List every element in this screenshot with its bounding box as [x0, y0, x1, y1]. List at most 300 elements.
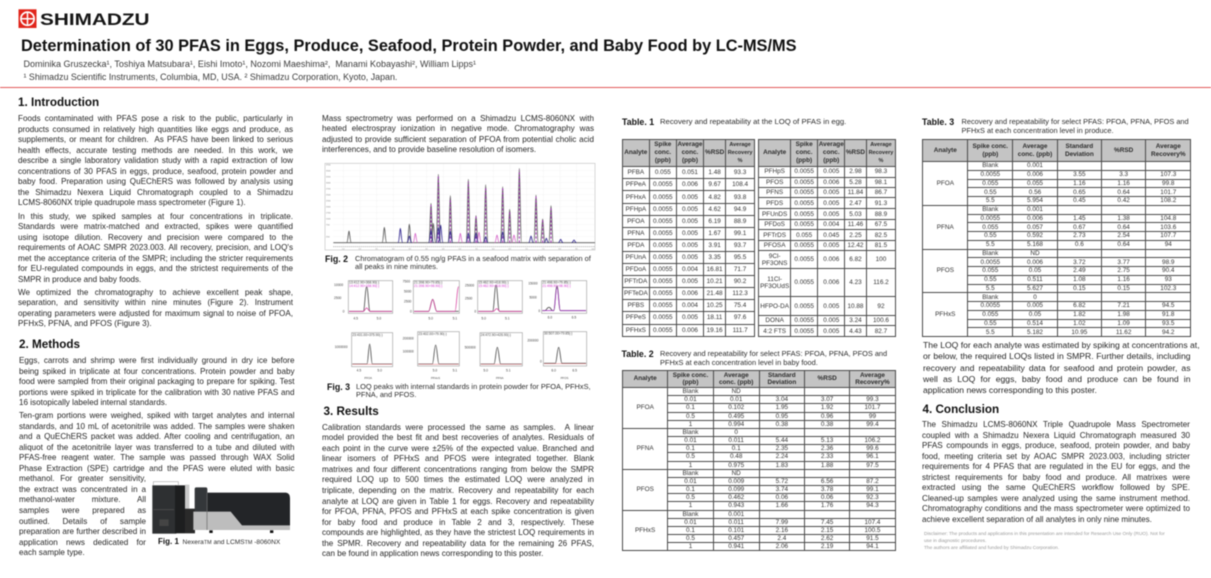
table 3 data: 0.592 [1027, 232, 1043, 239]
table 2 data: 87.2 [866, 478, 879, 485]
table 3 data: Average [1156, 143, 1181, 150]
table 3 data: 3.72 [1073, 259, 1086, 266]
table 3 data: 5.182 [1027, 329, 1043, 336]
table 3 data: 1.02 [1073, 320, 1086, 327]
table 1 left part: 10.21 [707, 278, 723, 285]
text: LOQ estimation paragraph: recovery and repeatability data for seafood and protein powder, as [923, 362, 1190, 372]
caption: figure 3: LOQ peaks with internal standards in protein powder for PFOA, PFHxS, [356, 382, 591, 390]
text: LOQ estimation paragraph: application news corresponding to this poster. [923, 385, 1097, 395]
panel: methods [18, 338, 295, 558]
text: results paragraph: matrixes and four different concentrations ranging from below the SMPR [322, 465, 594, 474]
table 3 data: 0.55 [984, 232, 997, 239]
table 1 left part: %RSD [705, 149, 724, 156]
table 2 data: 0.099 [728, 486, 744, 493]
table 2 data: Blank [682, 429, 698, 436]
table 3 data: PFHxS [935, 311, 955, 318]
text: conclusion paragraph: requirements for 4 PFAS that are regulated in the EU for eggs, and the [922, 462, 1190, 471]
table 3 data: ND [1030, 250, 1040, 257]
text: methods paragraph 2 narrow wrap: methanol-water mixture. All [19, 495, 146, 504]
table 1 left part: PFTeDA [624, 290, 648, 297]
table 3 data: 0.055 [982, 180, 998, 187]
text: introduction paragraph 1: supplements, or meant for children. As PFAS have been linked to serious [18, 135, 293, 144]
table 3 data: %RSD [1114, 147, 1133, 154]
table 1 left part: 108.4 [732, 181, 748, 188]
text: introduction paragraph 3: PFHxS, PFNA, and PFOS (Figure 3). [18, 319, 152, 328]
table 3 data: 0.67 [1073, 224, 1086, 231]
figure 2: chromatogram: 22500 [326, 201, 331, 203]
figure 3: LOQ peak panels: 23:431.00>375.90(-) [352, 333, 383, 337]
table 2 data: 0.5 [686, 453, 695, 460]
text: results paragraph: required LOQ up to 500 times the estimated LOQ were analyzed in [322, 475, 594, 484]
figure 3: LOQ peak panels: 5.0 [481, 316, 486, 320]
table 3 data: 0.05 [1029, 267, 1041, 274]
table 3 title [921, 117, 1189, 135]
text: disclaimer: Disclaimer: The products and applications in this presentation are intended for Research Use Only (RUO). Not for [924, 532, 1165, 536]
text: methods paragraph 2: Ten-gram portions were weighed, spiked with target analytes and internal [19, 411, 294, 420]
title: Determination of 30 PFAS in Eggs, Produce, Seafood, Protein Powder, and Baby Food by LC-MS/MS [21, 37, 797, 55]
table 2 data: 2.33 [821, 453, 833, 460]
table 2 data: 1 [689, 421, 692, 428]
table 2 data: 0.95 [776, 413, 788, 420]
table 3 data: 5.627 [1027, 285, 1043, 292]
table 2 data: Blank [682, 388, 698, 395]
figure 3: LOQ peak panels: PFHxS [431, 376, 440, 380]
table 3 data: Spike conc. [973, 143, 1008, 150]
table 3 data: 101.7 [1160, 189, 1176, 196]
figure 3: LOQ peak panels: 15:462.90>418.90(-) [478, 284, 509, 288]
table 1 right part: 6.82 [849, 256, 862, 263]
table 1 left part: (ppb) [682, 157, 698, 164]
text: chromatography paragraph [322, 114, 594, 154]
text: methods paragraph 2 narrow wrap: the extract was concentrated in a [19, 485, 146, 494]
table 2 data: 1.88 [821, 462, 833, 469]
table 1 right part: 0.045 [823, 232, 839, 239]
table 1 left part: PFNA [627, 230, 644, 237]
table 3 data: 107.7 [1160, 232, 1176, 239]
table 2 data: 99 [869, 413, 876, 420]
table 2 data: 2.24 [776, 453, 788, 460]
table 2 data: 3.07 [821, 396, 833, 403]
table 2 data: 0.96 [821, 413, 833, 420]
table 1 right part: 4.23 [849, 279, 862, 286]
table 1 left part: 0.0055 [653, 242, 673, 249]
text: introduction paragraph 2: requirements of AOAC SMPR 2023.003. All recovery, precision, and LOQ's [18, 243, 293, 252]
table 1 left part: 0.005 [682, 314, 698, 321]
table 3 data: 1.09 [1117, 320, 1130, 327]
figure 3: LOQ peak panels: 5.1 [505, 316, 510, 320]
table 1 right part: PFTrDS [763, 232, 786, 239]
table 2 data: 0 [734, 429, 738, 436]
figure 3: LOQ peak panels: 5.0 [377, 316, 381, 320]
figure 3: LOQ peak panels: 14:412.90>168.90(-) [349, 284, 379, 288]
figure 1: instrument photo [152, 480, 291, 534]
figure 3: LOQ peak panels: 1000000 [335, 345, 348, 349]
table 1 left part: Recovery [728, 150, 752, 156]
figure 3: LOQ peak panels: 24:472.90>426.90(-) [481, 333, 511, 337]
table 3 data: 0.514 [1027, 320, 1043, 327]
caption: figure 2: all peaks in nine minutes. [355, 262, 438, 271]
figure 3: LOQ peak panels: 21:498.90>79.85(-) [542, 281, 571, 285]
table 2 data: 96.1 [866, 453, 879, 460]
figure 2: chromatogram: 7500 [326, 225, 330, 227]
table 2 data: 1 [689, 462, 692, 469]
table 1 left part: Average [729, 142, 751, 148]
table 1 right part: 0.0055 [794, 328, 814, 335]
table 3 data: 0 [1033, 294, 1037, 301]
table 2 data: 1.83 [776, 462, 788, 469]
table 1 left part: 0.005 [682, 254, 698, 261]
text: chromatography paragraph: interferences, and to provide baseline resolution of isomers. [322, 145, 536, 154]
figure 3: LOQ peak panels: 5000 [529, 295, 537, 299]
text: introduction paragraph 2: In this study, we spiked samples at four concentrations in triplicate. [18, 212, 293, 221]
table 3 data: 0.55 [984, 320, 997, 327]
table 3 data: 11.62 [1116, 329, 1131, 336]
table 1 right part: DONA [765, 317, 784, 324]
table 1 right part: 0.0055 [794, 303, 814, 310]
table 1 right part: 11.46 [848, 221, 863, 228]
table 3 data: Analyte [934, 147, 957, 154]
text: methods paragraph 2: PFAS-free reagent water. The sample was passed through WAX Solid [19, 453, 294, 462]
table 2 data: 6.56 [821, 478, 833, 485]
figure 2: chromatogram: 4.0 [425, 248, 428, 250]
table 2 data: 0.38 [776, 421, 788, 428]
table 3 data: 0.001 [1027, 206, 1043, 213]
table 2 data: 1.92 [821, 404, 833, 411]
table 1 left part: 112.3 [732, 290, 748, 297]
text: results paragraph: for PFOA, PFNA, PFOS and PFHxS at each spike concentration is given [322, 507, 594, 516]
figure 2: chromatogram: 8.5 [575, 248, 578, 250]
table 3 data: PFOS [937, 267, 954, 274]
figure 2: chromatogram: 5.5 [475, 248, 478, 250]
table 1 right part: 0.005 [823, 168, 839, 175]
table 3 data: (ppb) [982, 150, 998, 158]
table 1 right part: 0.006 [823, 179, 839, 186]
figure 2: chromatogram: 25000 [326, 195, 331, 197]
text: conclusion paragraph: PFAS compounds in eggs, produce, seafood, protein powder, and baby [922, 441, 1190, 450]
table 1 right part: (ppb) [823, 157, 839, 164]
table 1 right part: 0.005 [823, 211, 839, 218]
table 1 right part: 0.005 [823, 303, 839, 310]
table 1 left part: 90.2 [734, 278, 746, 285]
table 3 data: 2.75 [1117, 267, 1130, 274]
table 2 data: 0.1 [686, 527, 695, 534]
table 3 data: 90.4 [1162, 267, 1174, 274]
table 1 left part: 0.006 [682, 290, 698, 297]
table 3 data: 5.5 [986, 329, 995, 336]
table 2 data: 97.5 [866, 462, 879, 469]
figure 2: chromatogram: 2.5 [375, 248, 378, 250]
figure 2: chromatogram [324, 162, 596, 251]
table 1 left part: 0.0055 [653, 278, 673, 285]
figure 3: LOQ peak panels: 15000 [528, 282, 538, 286]
table 1 right part: 9Cl- [769, 253, 780, 260]
text: methods paragraph 1: 16 isotopically labeled internal standards. [19, 398, 167, 407]
table 3 data: 5.954 [1027, 197, 1043, 204]
table 2 data: 0.975 [728, 462, 744, 469]
text: conclusion paragraph: achieve excellent separation of all analytes in only nine minutes. [922, 515, 1152, 524]
logo: Shimadzu [18, 8, 150, 29]
figure 3: LOQ peak panels: 21:498.90>98.90(-) [542, 284, 571, 288]
table 3 data: 94.2 [1162, 329, 1174, 336]
table 1 left part: 0.0055 [653, 314, 673, 321]
table 3 data: 0.64 [1117, 241, 1130, 248]
table 2 data: 5.13 [821, 437, 833, 444]
table 2 data: PFHxS [635, 527, 655, 534]
text: conclusion paragraph: coupled with a Shimadzu Nexera Liquid Chromatograph measured 30 [922, 431, 1190, 440]
table 1 left part: PFDA [627, 242, 644, 249]
table 1 right part: 100.6 [873, 317, 889, 324]
header: logo, title and authors [0, 8, 1211, 89]
table 1 right part: 0.0055 [794, 189, 814, 196]
table 3 data: 0.55 [984, 189, 997, 196]
text: introduction paragraph 2: using isotope dilution. Recovery and precision were compared to the [18, 233, 293, 242]
figure 2: chromatogram: 32500 [326, 177, 331, 179]
text: results paragraph: analyte at LOQ are given in Table 1 for eggs. Recovery and repeatability [322, 497, 594, 506]
table 2 data: 0.994 [728, 421, 744, 428]
figure 2: chromatogram: 30000 [326, 183, 331, 185]
table 1 right part: 0.0055 [794, 168, 814, 175]
table 1 right part: 88.9 [875, 211, 887, 218]
text: methods paragraph 2 [18, 411, 295, 474]
table 1 left part: % [738, 158, 743, 164]
figure 3: LOQ peak panels: 7500 [403, 280, 410, 284]
table 1 left part: 1.67 [708, 230, 721, 237]
table 1 left part: conc. [654, 149, 671, 156]
table 1 right part: 2.25 [849, 232, 862, 239]
table 1 left part: 0.0055 [653, 218, 673, 225]
figure 2: chromatogram: 37500 [326, 165, 331, 167]
figure 3: LOQ peak panels: 200000 [527, 339, 539, 343]
text: results paragraph [322, 423, 594, 558]
table 3 data: 5.5 [986, 285, 995, 292]
table 1 right part: Average [870, 142, 892, 148]
table 1 title: Recovery and repeatability at the LOQ of PFAS in egg. [660, 117, 846, 126]
text: introduction paragraph 2 [18, 212, 294, 284]
table 3 data: 103.6 [1160, 224, 1176, 231]
text: conclusion paragraph: food, meeting criteria set by AOAC SMPR 2023.003, including stricter [922, 452, 1190, 461]
table 1 right part [757, 138, 897, 338]
table 2 data: 100.5 [864, 527, 880, 534]
figure 3: LOQ peak panels: 2500 [465, 296, 473, 300]
text: conclusion paragraph: Chromatography conditions and the mass spectrometer were optimized to [922, 504, 1190, 513]
table 3 data: 0.511 [1027, 276, 1043, 283]
table 2 data: 0.01 [684, 519, 697, 526]
text: methods paragraph 1: being spiked in triplicate at four concentrations. Protein powder and baby [19, 367, 294, 376]
table 3 data: Average [1022, 143, 1047, 150]
figure 3: LOQ peak panels: 4.5 [357, 368, 361, 372]
figure 3: LOQ peak panels: PFNA [496, 376, 504, 380]
figure 3: LOQ peak panels: 5.1 [453, 368, 457, 372]
table 2 data: 107.4 [864, 519, 880, 526]
table 1 right part: 0.006 [823, 279, 839, 286]
text: conclusion paragraph: strictest requirements for baby food and produce. All matrixes were [922, 473, 1190, 482]
table 1 left part: PFHxS [626, 327, 646, 334]
table 2 data: 0.1 [686, 486, 695, 493]
table 1 right part: 91.3 [875, 200, 887, 207]
table 1 right part: 3.24 [849, 317, 862, 324]
table 1 left part: 71.7 [734, 266, 746, 273]
table 2 data: Analyte [634, 375, 657, 382]
table 2 data: 3.78 [821, 486, 833, 493]
table 3 data: Blank [982, 294, 998, 301]
table 1 left part: Spike [654, 141, 671, 148]
caption: figure 2: Chromatogram of 0.55 ng/g PFAS in a seafood matrix with separation of [355, 254, 591, 262]
table 3 data: 0.0055 [981, 215, 1000, 222]
text: introduction paragraph 1: products consumed in relatively high quantities like eggs and produce, as [18, 125, 293, 134]
table 2 data: Average [860, 372, 885, 379]
table 1 left part: conc. [682, 149, 698, 156]
table 1 right part: 0.055 [796, 232, 812, 239]
table 2 data: PFOS [636, 486, 654, 493]
table 3 data: 0.0055 [981, 259, 1000, 266]
table 1 left part: 0.0055 [653, 194, 673, 201]
text: methods paragraph 2 narrow wrap [18, 474, 146, 558]
table 1 left part [621, 138, 756, 338]
table 3 data: 2.54 [1117, 232, 1130, 239]
table 1 right part: 0.005 [823, 328, 839, 335]
figure 3: LOQ peak panels: PFOS [561, 376, 568, 380]
text: LOQ estimation paragraph [922, 340, 1200, 396]
table 1 left part: 0.006 [682, 181, 698, 188]
table 2 data: 1.66 [776, 502, 788, 509]
table 3 data: 0.005 [1027, 302, 1043, 309]
figure 3: LOQ peak panels: 23:402.00>79.90(-) [418, 332, 447, 336]
figure 3: LOQ peak panels: 6.5 [572, 316, 576, 320]
text: methods paragraph 1 [18, 356, 295, 408]
figure 3: LOQ peak panels: 4.5 [353, 316, 358, 320]
table 1 right part: 2.98 [849, 168, 862, 175]
table 1 left part: 0.005 [682, 194, 698, 201]
figure 2: chromatogram: 8.0 [559, 248, 561, 250]
table 1 left part: 16.81 [707, 266, 723, 273]
table 1 left part: 93.8 [734, 194, 746, 201]
table 3 data: Standard [1065, 143, 1093, 150]
table 3 data: 93.5 [1162, 320, 1174, 327]
table 2 data: 94.1 [866, 543, 879, 550]
text: introduction paragraph 1: describe a single laboratory validation study with a rapid extraction of low [18, 156, 293, 165]
figure 2: chromatogram: min [592, 248, 594, 250]
table 2 data: 7.99 [776, 519, 788, 526]
text: disclaimer: use in diagnostic procedures. [924, 539, 986, 544]
text: results paragraph: the SPMR. Recovery and repeatability data for the remaining 26 PFAS, [322, 539, 594, 548]
text: conclusion paragraph: extracted using the same QuEChERS workflow followed by SPE. [922, 483, 1190, 492]
text: introduction paragraph 1 [18, 114, 294, 208]
table 1 left part: 111.7 [733, 327, 748, 334]
table 1 right part: PFOSA [764, 242, 785, 249]
table 1 left part: 19.16 [707, 327, 723, 334]
table 1 left part: Analyte [624, 149, 647, 156]
panel: table 1 [621, 117, 897, 338]
table 3 data: 5.168 [1027, 241, 1043, 248]
heading: conclusion: 4. Conclusion [922, 403, 999, 416]
table 2 data: 3.04 [776, 396, 788, 403]
table 2 data: (ppb) [682, 379, 698, 386]
table 3 data: 0.64 [1117, 224, 1130, 231]
table 2 data: Deviation [767, 379, 796, 386]
figure 2: chromatogram: 6.5 [509, 248, 511, 250]
figure 3: LOQ peak panels: 500000 [465, 345, 476, 349]
text: methods paragraph 2: aliquot of the acetonitrile layer was transferred to a tube and diluted with [19, 443, 294, 452]
table 3 data: PFNA [937, 224, 954, 231]
table 2 data: Spike conc. [673, 372, 708, 379]
text: conclusion paragraph: The Shimadzu LCMS-8060NX Triple Quadrupole Mass Spectrometer [922, 420, 1190, 429]
table 1 right part: 0.0055 [794, 221, 814, 228]
table 3 data: 0.0055 [981, 302, 1000, 309]
table 2 data: Blank [682, 511, 698, 518]
text: methods paragraph 1: Eggs, carrots and shrimp were first individually ground in dry ice before [19, 356, 294, 365]
table 2 data: 101.7 [864, 404, 880, 411]
figure 2: chromatogram: 2.0 [359, 248, 361, 250]
text: introduction paragraph 2: for EU-regulated compounds in eggs, and the strictest requirements of the [18, 264, 293, 273]
text: methods paragraph 2: and a QuEChERS packet was added. After cooling and centrifugation, an [19, 432, 294, 441]
table 2 title: PFHxS at each concentration level in baby food. [660, 358, 818, 367]
table 3 data: 5.5 [986, 241, 995, 248]
table 1 left part: 0.0055 [653, 327, 673, 334]
caption: figure 3: PFNA, and PFOS. [356, 390, 416, 399]
text: methods paragraph 2 narrow wrap: each sample type. [19, 548, 85, 557]
table 3 data: 1.16 [1073, 180, 1086, 187]
figure 2: chromatogram: 4.5 [442, 248, 444, 250]
table 2 data: PFOA [636, 404, 654, 411]
table 2 data: PFNA [637, 445, 654, 452]
logo: Shimadzu: SHIMADZU [40, 11, 150, 29]
table 2 data: 0.462 [728, 494, 744, 501]
table 3 data: 104.8 [1160, 215, 1176, 222]
table 2 data: 5.44 [776, 437, 788, 444]
table 3 data: 107.3 [1160, 171, 1176, 178]
table 1 left part: 75.4 [734, 302, 746, 309]
table 3 data: 0.55 [984, 276, 997, 283]
table 1 right part: 0.006 [823, 256, 839, 263]
table 2 data: 2.19 [821, 543, 833, 550]
table 1 left part: PFBA [627, 169, 644, 176]
table 1 left part: PFHxA [626, 194, 646, 201]
table 3 data: 94.5 [1162, 302, 1174, 309]
table 1 right part: 11Cl- [767, 276, 782, 283]
table 1 left part: 95.5 [734, 254, 746, 261]
table 3 data: 7.21 [1117, 302, 1130, 309]
text: introduction paragraph 1: the Shimadzu Nexera Liquid Chromatograph coupled to a Shimadzu [18, 188, 293, 197]
table 1 right part: PF3ONS [762, 260, 787, 267]
figure 2: chromatogram: 6.0 [492, 248, 494, 250]
caption: figure 3 [326, 382, 591, 399]
table 2 data: ND [732, 388, 741, 395]
table 1 right part: PFOS [766, 179, 783, 186]
table 2 data: 0.5 [686, 535, 695, 542]
table 3 title: Table. 3 [922, 117, 954, 127]
text: results paragraph: can be found in application news corresponding to this poster. [322, 549, 543, 558]
table 2 data: Average [724, 372, 749, 379]
table 1 right part: PF3OUdS [760, 283, 789, 290]
table 3 data: 0.05 [1029, 311, 1041, 318]
table 1 right part: 0.0055 [794, 200, 814, 207]
table 2 data: 99.1 [866, 486, 879, 493]
figure 3: LOQ peak panels: 6.0 [551, 368, 556, 372]
table 2 data: 99.6 [866, 445, 879, 452]
table 3 data: 0.006 [1027, 171, 1043, 178]
table 3 data: 3.77 [1117, 259, 1130, 266]
table 2 data: 0.941 [728, 543, 744, 550]
table 3 data: Deviation [1065, 150, 1094, 158]
table 1 left part: 0.0055 [653, 230, 673, 237]
table 2 title: Recovery and repeatability for select PFAS: PFOA, PFNA, PFOS and [660, 348, 887, 358]
table 2 data: 0.495 [728, 413, 744, 420]
table 2 data: 0.06 [776, 494, 788, 501]
caption: figure 1: Fig. 1 NexeraTM and LCMSTM -8060NX [158, 536, 280, 546]
table 1 left part: 0.0055 [653, 302, 673, 309]
text: methods paragraph 2: standards, and 10 mL of acetonitrile was added. The samples were shaken [19, 422, 294, 431]
table 3 data: 0.42 [1117, 197, 1130, 204]
